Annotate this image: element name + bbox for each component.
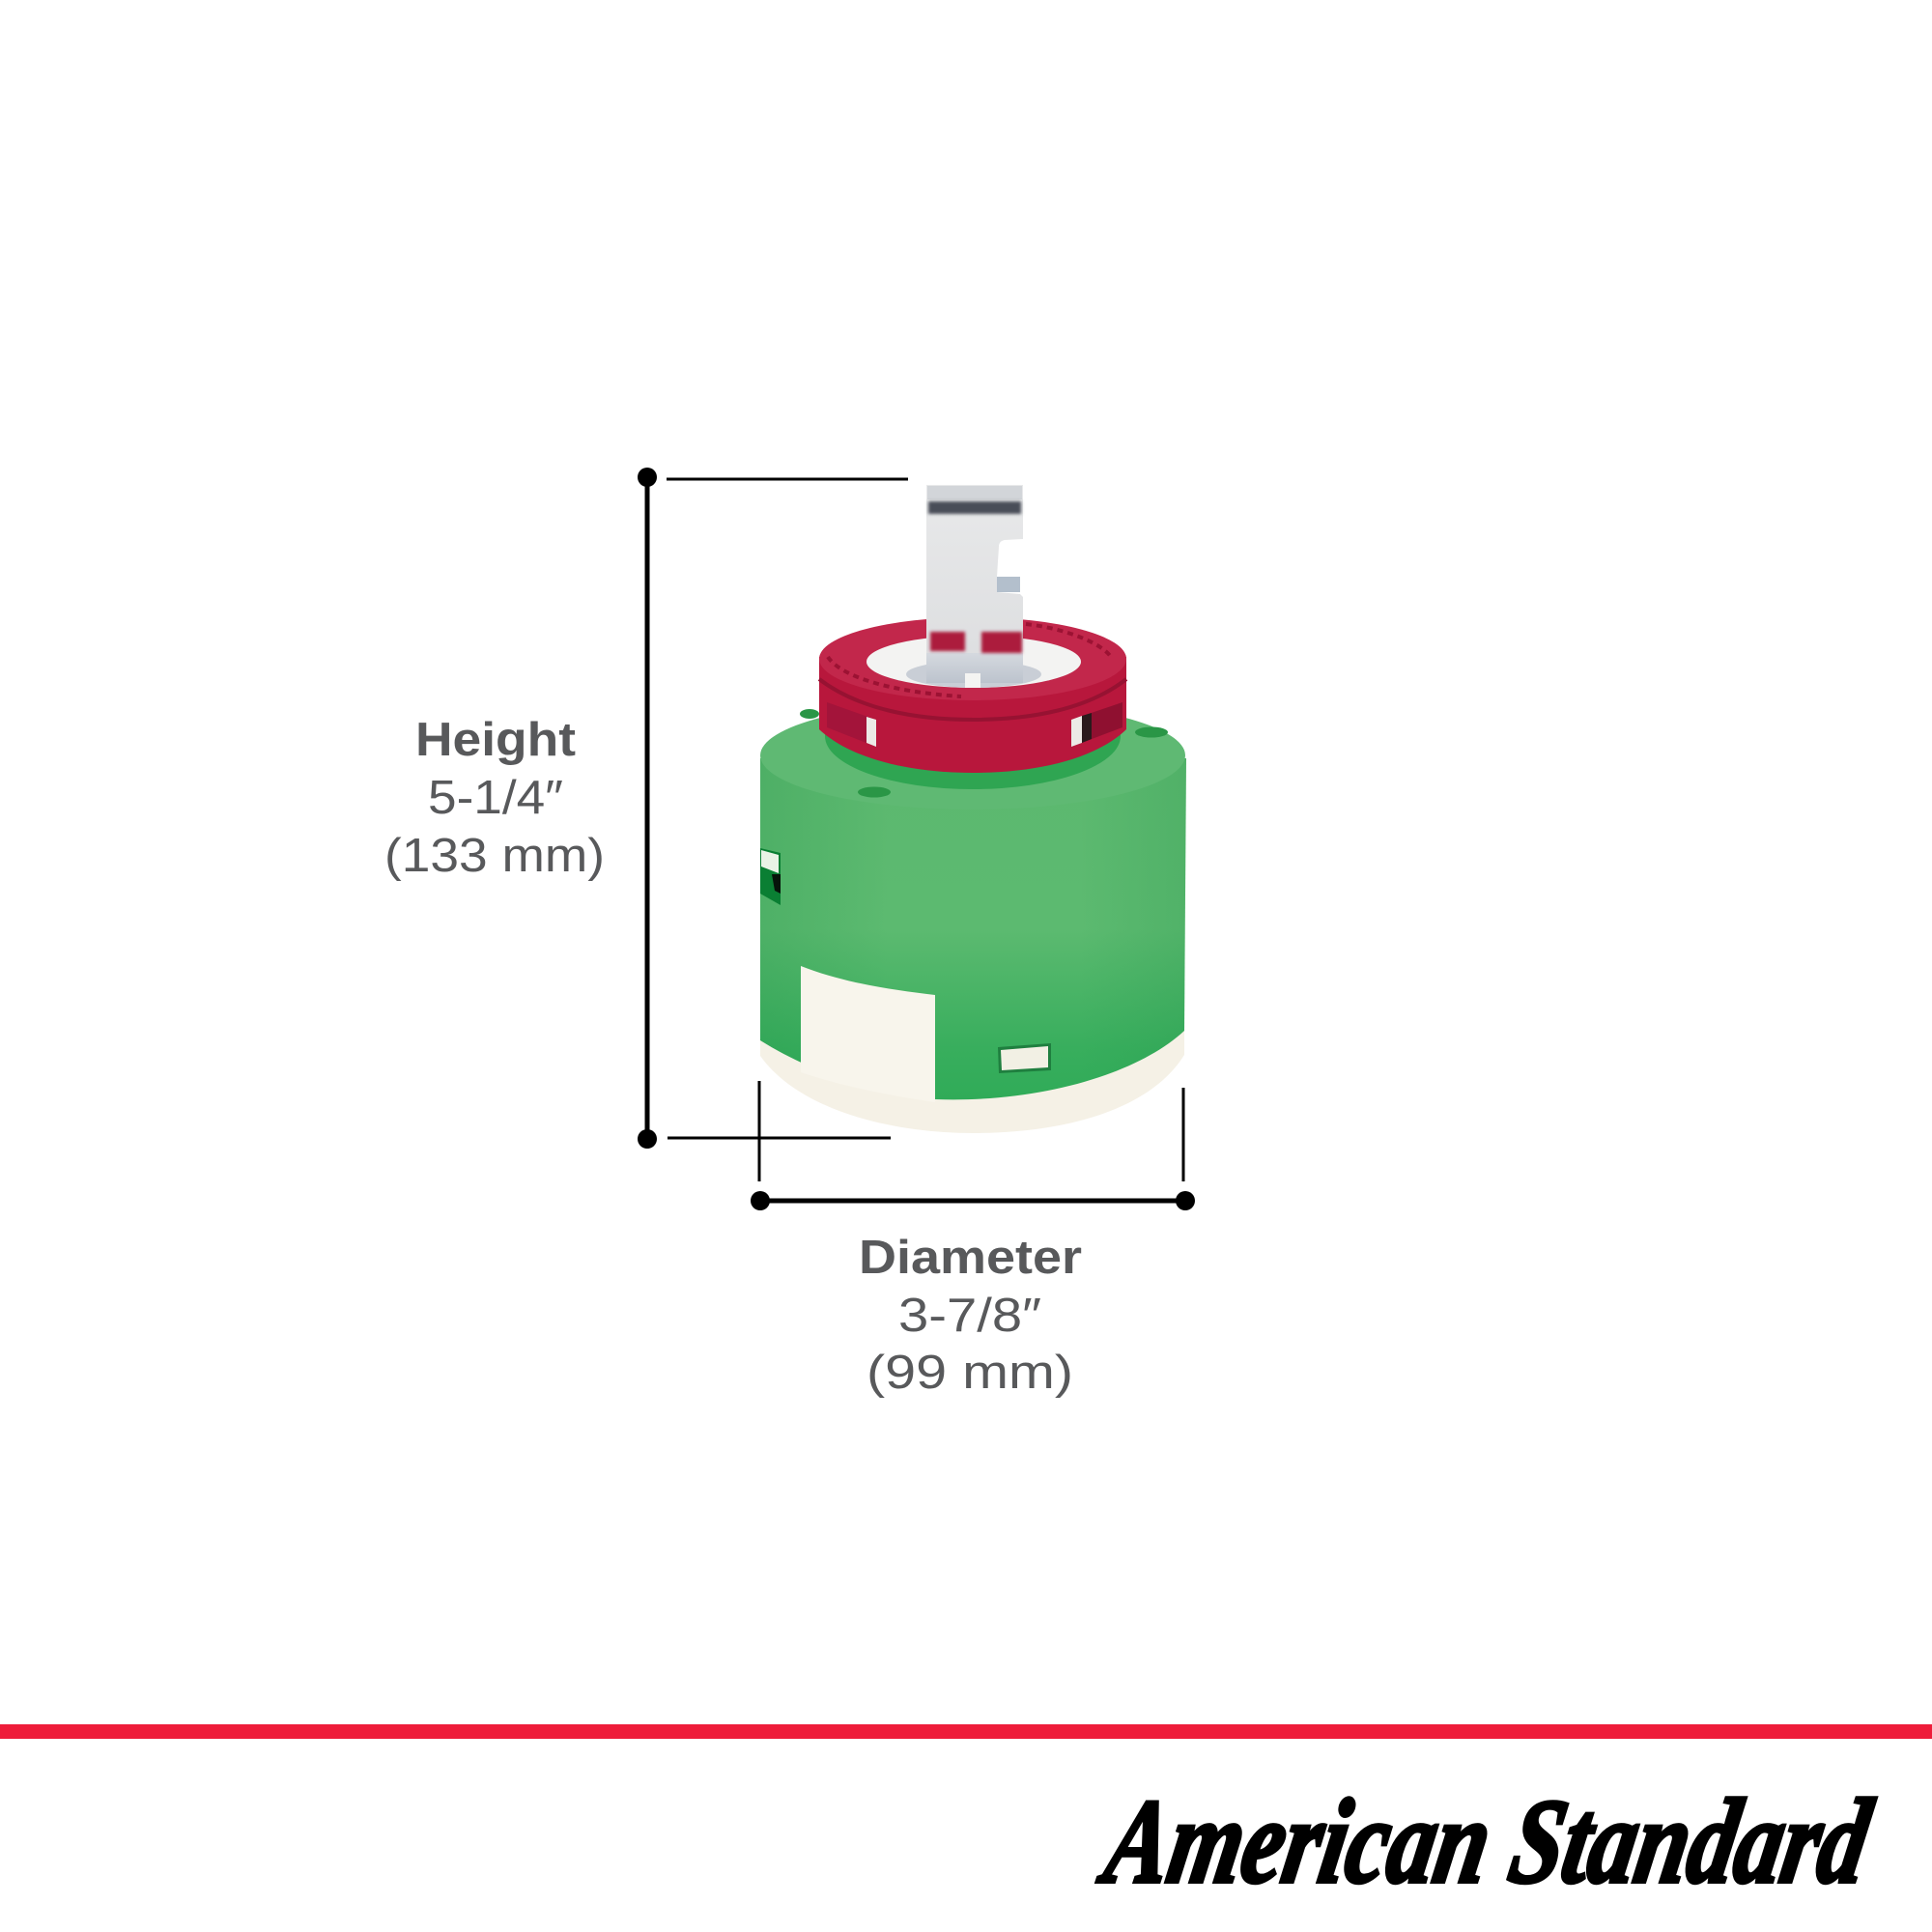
side notch [760,848,781,905]
stem top band [927,486,1022,499]
slot highlight [965,673,980,688]
infographic canvas [0,468,1932,1886]
height label [384,714,605,882]
small window [998,1043,1051,1073]
cartridge cream base [760,1024,1184,1133]
green inner ring [825,683,1121,789]
stem red reflections [930,632,1022,653]
collar groove [819,679,1126,720]
collar right window [1071,702,1122,747]
red collar top [819,617,1126,700]
stem lower reflection [926,653,1023,683]
diameter label: Diameter [859,1232,1082,1284]
red collar body [819,657,1126,773]
diameter label: (99 mm) [867,1347,1073,1399]
cartridge green body [760,758,1186,1099]
product: valve cartridge [760,485,1186,1133]
collar embossed marks right [1026,624,1111,657]
height label: 5-1/4″ [428,772,563,824]
mounting holes [800,709,1168,798]
collar embossed marks left [828,657,961,696]
diameter label [859,1232,1082,1399]
cream tab [801,966,935,1102]
metal stem [926,485,1023,688]
red footer rule [0,1724,1932,1739]
collar opening [867,636,1081,688]
stem dark band [928,501,1021,514]
stem tab [997,577,1020,592]
collar inner seat [906,665,1041,688]
collar left window [827,702,876,747]
cartridge green top surface [760,701,1185,810]
diameter label: 3-7/8″ [898,1290,1041,1342]
height dimension marker [638,468,908,1149]
height label: (133 mm) [384,830,605,882]
diameter dimension marker [751,1081,1195,1210]
body side shading [760,758,1186,1099]
height label: Height [415,714,576,766]
